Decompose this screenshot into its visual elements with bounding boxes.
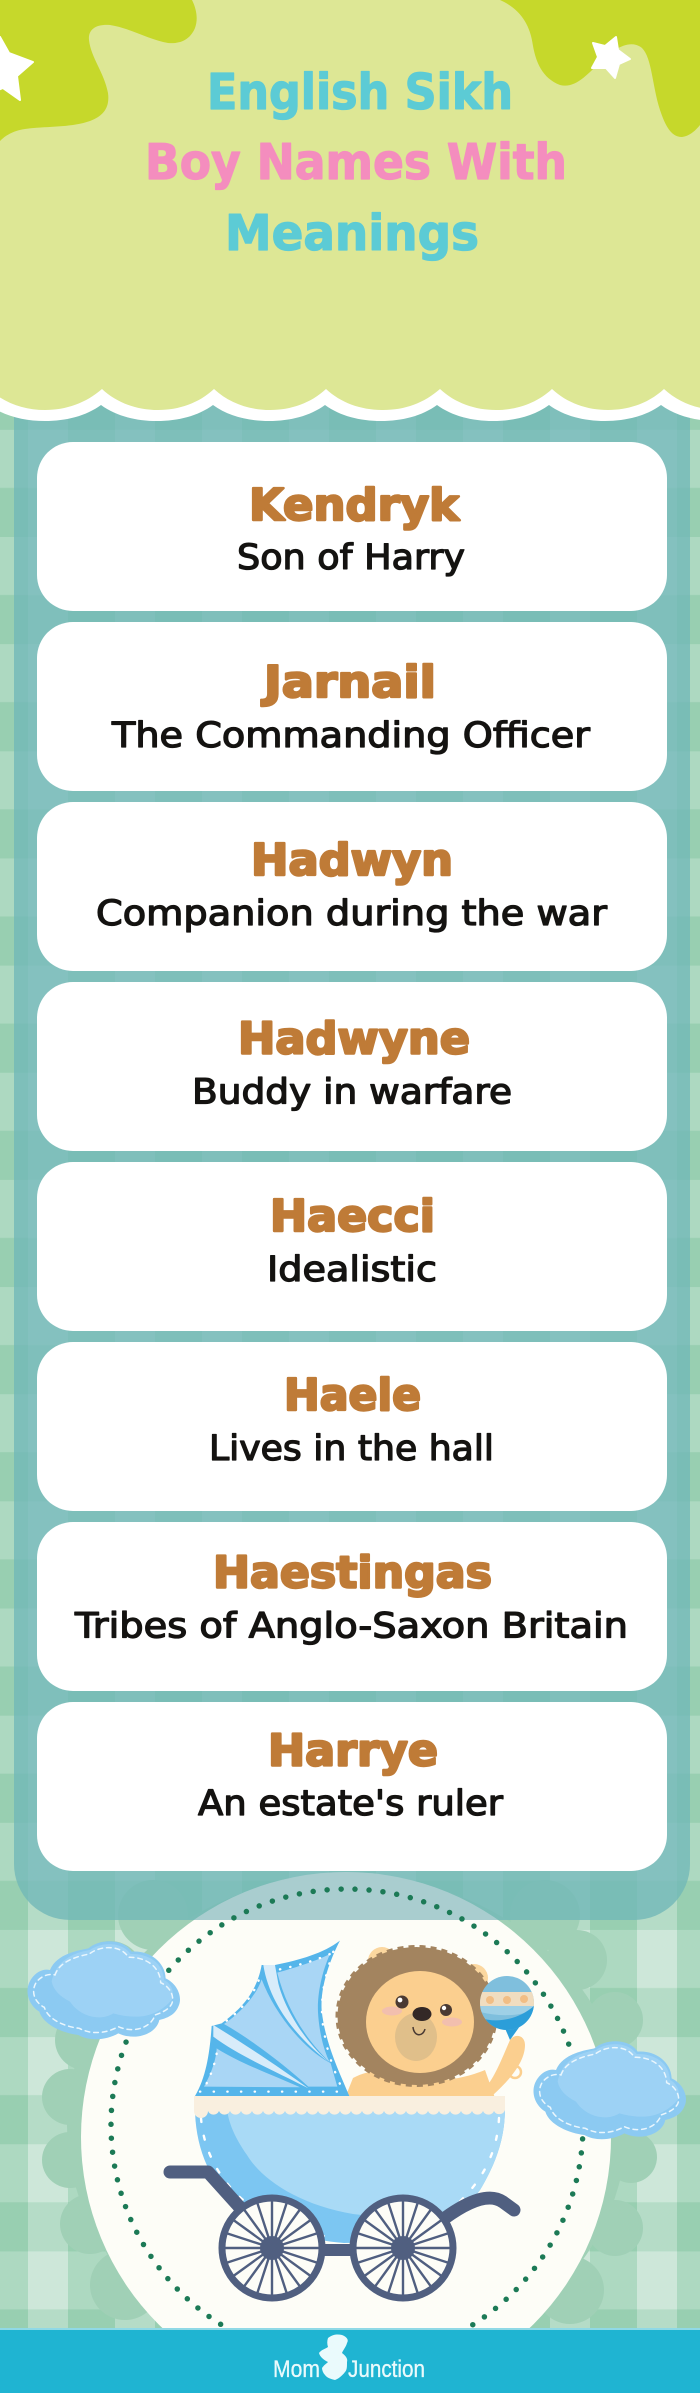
card: Hadwyne: Buddy in warfare — [192, 1072, 512, 1112]
carriage chassis — [170, 2172, 514, 2250]
card: Hadwyn: Hadwyn — [251, 835, 453, 886]
lion face — [366, 1971, 474, 2073]
card: Kendryk: Son of Harry — [237, 538, 465, 578]
right handle — [445, 2198, 514, 2218]
card: Harrye: An estate's ruler — [198, 1784, 504, 1824]
card: Haecci: Haecci — [270, 1191, 435, 1242]
right wheel — [353, 2198, 453, 2298]
icon: lion with rattle — [338, 1947, 534, 2098]
lion mouth — [413, 2027, 425, 2035]
card: Haestingas — [37, 1522, 667, 1691]
cream circle — [81, 1872, 611, 2393]
card: Haele: Haele — [284, 1370, 421, 1421]
right green blob — [500, 0, 700, 137]
icon: left cloud — [27, 1941, 180, 2039]
axle — [320, 2244, 355, 2256]
footer bar — [0, 2328, 700, 2393]
circle seen through panel — [194, 1872, 498, 1920]
left star — [0, 37, 33, 100]
lion eyes — [396, 1996, 452, 2016]
lion muzzle — [395, 2013, 437, 2061]
logo wordmark Junction: Junction — [348, 2356, 425, 2383]
card: Haecci: Idealistic — [267, 1250, 437, 1290]
arm ring — [509, 2066, 521, 2078]
lion cheeks — [382, 2006, 462, 2026]
header fill — [0, 0, 700, 410]
card: Harrye: Harrye — [268, 1726, 438, 1776]
right star — [592, 37, 630, 78]
card: Harrye — [37, 1702, 667, 1871]
icon: carriage basket — [195, 2108, 505, 2243]
teal list panel — [14, 300, 690, 1920]
lion nose — [412, 2007, 432, 2021]
title: English Sikh — [207, 64, 513, 121]
MomJunction logo — [273, 2334, 425, 2383]
scallop white edge — [0, 0, 700, 421]
card: Haecci — [37, 1162, 667, 1331]
scalloped green backdrop — [42, 1875, 657, 2375]
card: Jarnail — [37, 622, 667, 791]
carriage trim — [194, 2096, 505, 2118]
left handle — [170, 2172, 244, 2212]
icon: right cloud — [533, 2041, 686, 2139]
title: Meanings — [225, 205, 479, 262]
card: Haele: Lives in the hall — [209, 1429, 494, 1469]
logo mark — [319, 2334, 348, 2380]
card: Hadwyn: Companion during the war — [96, 894, 608, 934]
left wheel — [222, 2198, 322, 2298]
card: Haele — [37, 1342, 667, 1511]
lion arm — [477, 2036, 525, 2097]
lion mane — [338, 1947, 496, 2085]
dotted ring — [111, 1889, 583, 2361]
card: Haestingas: Tribes of Anglo-Saxon Britain — [74, 1606, 628, 1646]
lion body — [345, 2070, 495, 2098]
card: Kendryk — [37, 442, 667, 611]
card: Kendryk: Kendryk — [249, 480, 461, 531]
card: Hadwyne — [37, 982, 667, 1151]
logo wordmark Mom: Mom — [273, 2356, 320, 2383]
left green blob — [0, 0, 197, 141]
card: Jarnail: Jarnail — [261, 657, 436, 708]
title: Boy Names With — [145, 134, 567, 191]
card: Hadwyn — [37, 802, 667, 971]
header — [0, 0, 700, 421]
rattle — [480, 1976, 534, 2040]
lion ears — [368, 1947, 488, 1992]
icon: carriage hood — [195, 1941, 349, 2096]
title — [145, 64, 567, 262]
card: Hadwyne: Hadwyne — [238, 1014, 470, 1064]
card: Haestingas: Haestingas — [213, 1548, 492, 1598]
card: Jarnail: The Commanding Officer — [111, 716, 591, 756]
